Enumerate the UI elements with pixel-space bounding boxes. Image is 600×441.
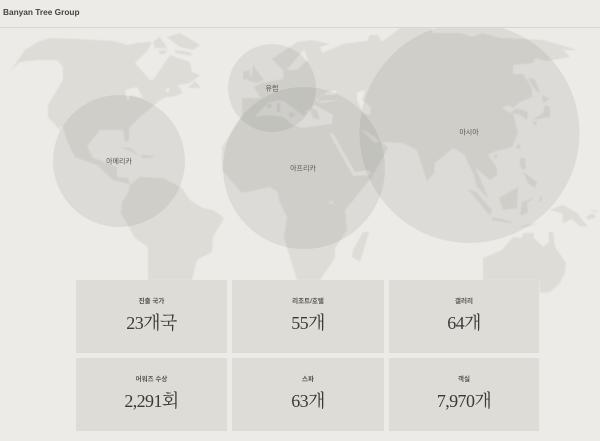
circle: Europe [228,44,316,132]
card label: 리조트/호텔 [292,298,324,304]
card value: 7,970개 [437,391,491,411]
stat card: galleries [389,280,539,352]
region circles [53,23,580,249]
circle: Americas [53,95,185,227]
North America [11,38,200,185]
United Kingdom and Ireland [247,65,264,83]
circle: Africa [223,87,385,249]
Japan and north Pacific islands [533,105,550,120]
Eurasia and Africa [222,28,578,280]
label: Africa: 아프리카 [290,164,316,172]
Black Sea [315,90,340,103]
Mediterranean [255,100,333,128]
Australia [483,232,566,293]
label: Americas: 아메리카 [106,156,132,166]
card value: 2,291회 [124,391,179,411]
New Guinea and Pacific islands [550,205,588,227]
map: inland seas [60,87,380,204]
Baja gulf [60,127,68,146]
card value: 55개 [291,312,325,332]
Southeast Asia islands [520,158,526,170]
stat card: spas [232,358,384,431]
region labels [106,84,479,172]
Great Lakes [125,87,143,102]
map: continents [11,28,597,293]
label: Asia: 아시아 [459,128,479,136]
card value: 63개 [291,391,325,411]
label: Europe: 유럽 [266,84,278,92]
stat card: resorts and hotels [232,280,384,352]
Italy and Mediterranean islands [265,96,320,120]
stat card: rooms [389,358,539,431]
card label: 스파 [302,376,314,383]
Madagascar [352,232,369,262]
card value: 64개 [447,312,481,332]
Red Sea [329,133,372,176]
African lake [328,200,333,204]
South America [121,177,224,280]
card label: 객실 [458,376,470,383]
circle: Asia [360,23,580,243]
stat card: awards [76,358,227,431]
brand title: Banyan Tree Group [3,7,80,17]
card label: 어워즈 수상 [136,376,167,383]
stat card: countries [76,280,227,352]
header [0,0,600,28]
Caspian Sea [357,90,371,115]
Persian Gulf [361,130,380,143]
card label: 진출 국가 [139,298,164,304]
card label: 갤러리 [455,298,473,304]
card value: 23개국 [126,312,177,332]
